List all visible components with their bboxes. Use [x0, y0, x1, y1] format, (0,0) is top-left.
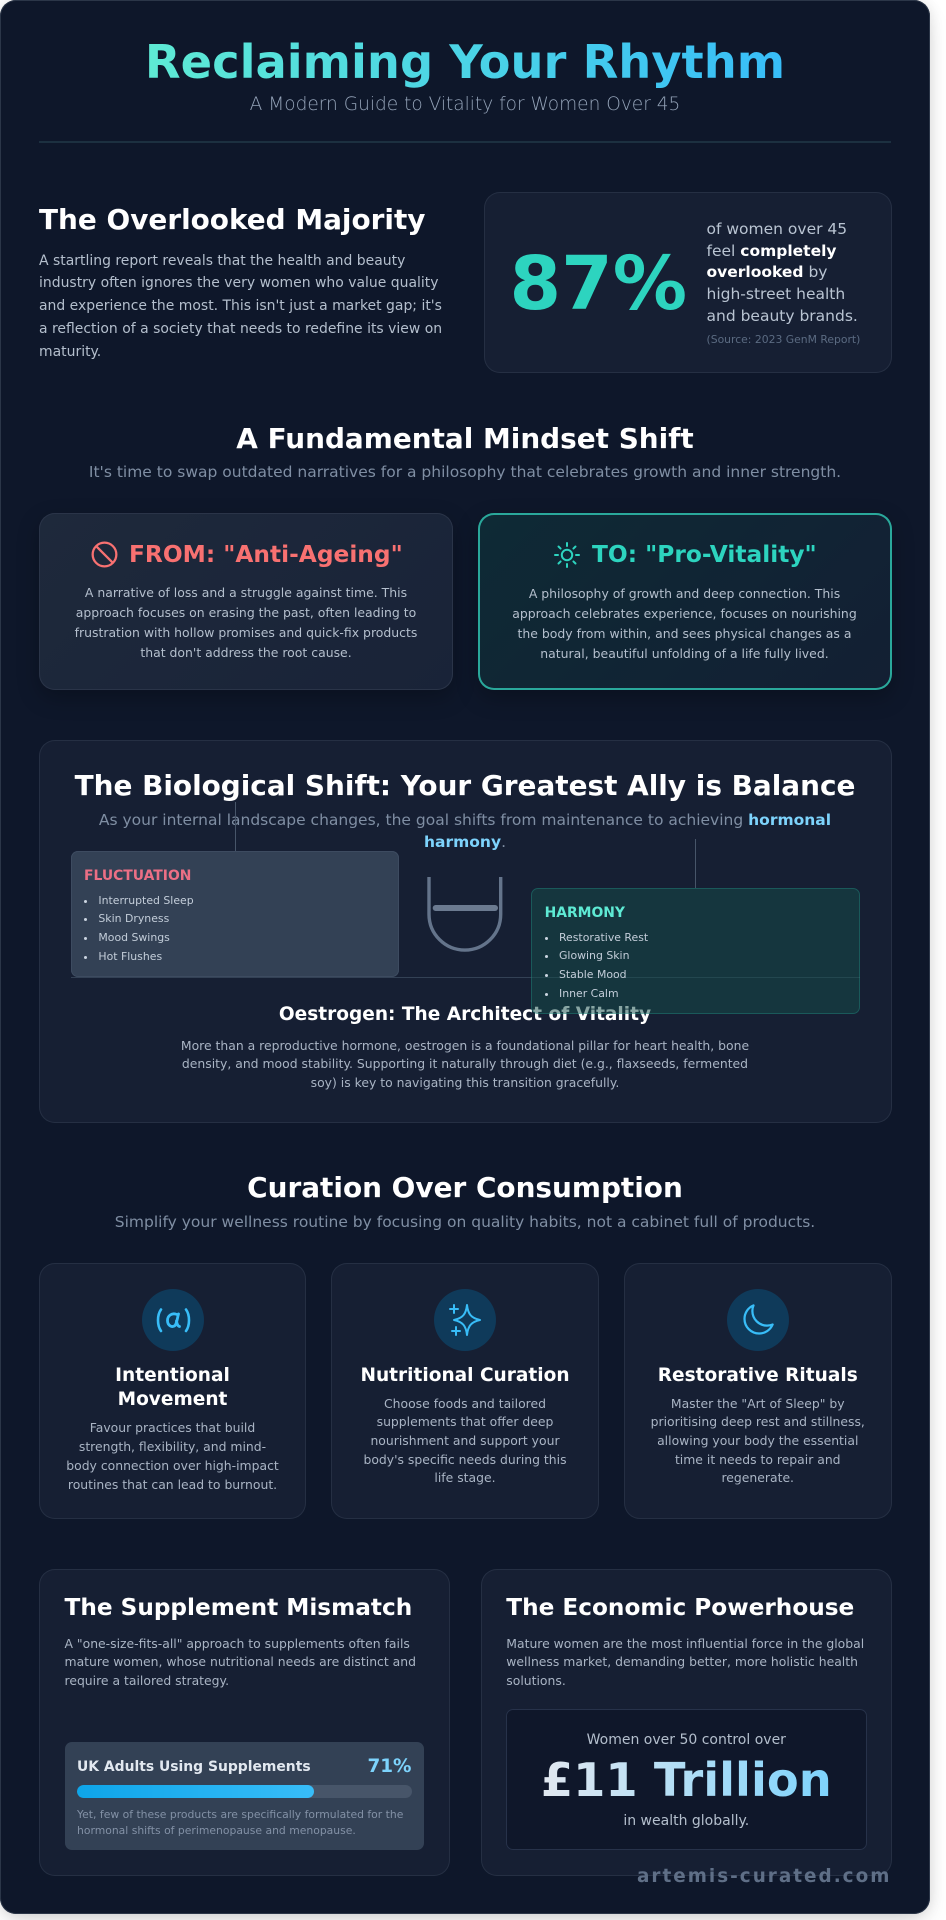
subheading: harmony.	[424, 832, 506, 850]
card heading: Movement	[118, 1389, 227, 1410]
subheading: As your internal landscape changes, the goal shifts from maintenance to achieving hormonal	[99, 810, 831, 828]
heading: The Supplement Mismatch	[64, 1594, 412, 1621]
panel: intentional movement	[39, 1263, 306, 1519]
card text	[363, 1396, 567, 1485]
text block: Mature women are the most influential force in the global	[506, 1636, 864, 1650]
card text: Choose foods and tailored	[384, 1396, 546, 1410]
card heading: TO: "Pro-Vitality"	[592, 541, 817, 568]
card text: nourishment and support your	[370, 1433, 560, 1448]
progress card	[64, 1742, 424, 1850]
panel: to pro-vitality	[478, 513, 892, 690]
oestrogen text: More than a reproductive hormone, oestrogen is a foundational pillar for heart health, bone	[181, 1038, 749, 1052]
list: Restorative Rest	[559, 931, 648, 944]
card text	[66, 1420, 279, 1492]
card text: strength, flexibility, and mind-	[79, 1439, 266, 1454]
text block	[39, 253, 442, 360]
list: Glowing Skin	[559, 949, 629, 962]
panel: supplement mismatch	[39, 1569, 450, 1876]
bar fill	[77, 1785, 314, 1798]
panel: restorative rituals	[624, 1263, 892, 1519]
section heading: curation	[115, 1171, 815, 1230]
oestrogen text: density, and mood stability. Supporting it naturally through diet (e.g., flaxseeds, fermented	[182, 1056, 748, 1071]
watermark: artemis-curated.com	[637, 1866, 891, 1887]
card text: regenerate.	[721, 1470, 794, 1485]
card text: life stage.	[434, 1470, 496, 1485]
stat text: feel completely	[706, 242, 837, 260]
fluctuation box	[71, 851, 399, 977]
card text: supplements that offer deep	[377, 1414, 553, 1429]
card text	[74, 584, 417, 660]
card text: body's specific needs during this	[363, 1452, 567, 1467]
wealth intro: Women over 50 control over	[587, 1732, 786, 1748]
card text: routines that can lead to burnout.	[68, 1476, 277, 1492]
list: Skin Dryness	[98, 912, 169, 925]
section heading: mindset shift	[89, 422, 841, 480]
progress note: hormonal shifts of perimenopause and menopause.	[77, 1824, 356, 1837]
card text: prioritising deep rest and stillness,	[651, 1414, 865, 1429]
stat text: high-street health	[706, 285, 845, 303]
icon: movement signal	[142, 1289, 204, 1351]
card text: A philosophy of growth and deep connection. This	[529, 586, 840, 601]
list: Inner Calm	[559, 987, 619, 1000]
heading: The Biological Shift: Your Greatest Ally is Balance	[75, 769, 855, 802]
icon: sparkles	[434, 1289, 496, 1351]
card text: natural, beautiful unfolding of a life fully lived.	[540, 646, 829, 661]
card heading: FROM: "Anti-Ageing"	[129, 541, 403, 568]
heading: The Overlooked Majority	[39, 202, 425, 236]
card text	[651, 1396, 865, 1485]
stat text: overlooked by	[706, 263, 827, 281]
card text: that don't address the root cause.	[140, 645, 352, 660]
box heading: HARMONY	[545, 905, 625, 921]
box heading: FLUCTUATION	[84, 868, 191, 884]
oestrogen text: soy) is key to navigating this transition gracefully.	[311, 1075, 619, 1090]
heading: The Economic Powerhouse	[506, 1594, 854, 1621]
text block	[506, 1636, 864, 1688]
text block: solutions.	[506, 1673, 566, 1688]
card text: body connection over high-impact	[66, 1458, 279, 1473]
stat text: of women over 45	[706, 220, 847, 238]
text block: A "one-size-fits-all" approach to supplements often fails	[64, 1636, 410, 1650]
progress note: Yet, few of these products are specifically formulated for the	[77, 1808, 403, 1821]
panel: biological shift	[39, 740, 892, 1123]
text block: require a tailored strategy.	[64, 1673, 229, 1688]
big stat: 87%	[510, 241, 687, 327]
card text: allowing your body the essential	[657, 1433, 858, 1448]
card heading	[115, 1364, 230, 1410]
card text: Master the "Art of Sleep" by	[671, 1396, 845, 1410]
progress note	[77, 1808, 403, 1837]
card heading: Restorative Rituals	[658, 1364, 858, 1386]
subheading: Simplify your wellness routine by focusing on quality habits, not a cabinet full of products.	[115, 1212, 815, 1230]
list	[84, 894, 194, 963]
card text: frustration with hollow promises and quick-fix products	[75, 625, 417, 640]
progress value: 71%	[367, 1756, 412, 1776]
card text: the body from within, and sees physical changes as a	[517, 626, 852, 641]
card text	[512, 586, 857, 661]
text block	[64, 1636, 416, 1688]
card text: time it needs to repair and	[675, 1452, 841, 1467]
heading: A Fundamental Mindset Shift	[236, 422, 694, 455]
progress label: UK Adults Using Supplements	[77, 1759, 311, 1775]
progress bar	[77, 1785, 412, 1798]
text block: A startling report reveals that the health and beauty	[39, 253, 405, 269]
wealth card	[506, 1709, 867, 1850]
subtitle: A Modern Guide to Vitality for Women Over 45	[250, 94, 680, 115]
wealth note: in wealth globally.	[623, 1813, 749, 1829]
list: Stable Mood	[559, 968, 627, 981]
stat text	[706, 220, 858, 325]
list: Interrupted Sleep	[98, 894, 194, 907]
list: Hot Flushes	[98, 950, 162, 963]
text block: industry often ignores the very women who value quality	[39, 275, 438, 291]
subheading: It's time to swap outdated narratives for a philosophy that celebrates growth and inner strength.	[89, 462, 841, 480]
card text: Favour practices that build	[90, 1420, 255, 1435]
oestrogen heading: Oestrogen: The Architect of Vitality	[279, 1004, 651, 1025]
icon: prohibited	[92, 542, 118, 568]
list	[545, 931, 648, 1000]
list: Mood Swings	[98, 931, 170, 944]
text block: a reflection of a society that needs to redefine its view on	[39, 321, 442, 337]
panel: economic powerhouse	[481, 1569, 892, 1876]
wealth value: £11 Trillion	[541, 1753, 832, 1807]
card text: approach focuses on erasing the past, often leading to	[76, 605, 416, 620]
card heading: Nutritional Curation	[360, 1364, 570, 1386]
source: (Source: 2023 GenM Report)	[706, 333, 860, 346]
text block: wellness market, demanding better, more holistic health	[506, 1654, 858, 1669]
card text: A narrative of loss and a struggle against time. This	[85, 584, 407, 600]
panel: nutritional curation	[331, 1263, 599, 1519]
icon: moon	[727, 1289, 789, 1351]
heading: Curation Over Consumption	[247, 1171, 683, 1204]
icon: balance bowl	[427, 877, 502, 952]
oestrogen text	[181, 1038, 749, 1090]
section: the overlooked majority	[39, 202, 442, 360]
text block: maturity.	[39, 344, 101, 360]
panel: 87% stat card	[484, 192, 892, 373]
stat text: and beauty brands.	[706, 307, 858, 325]
icon: sun	[554, 542, 580, 568]
panel: from anti-ageing	[39, 513, 453, 690]
card heading: Intentional	[115, 1364, 230, 1386]
subheading	[99, 810, 831, 850]
harmony box	[531, 888, 860, 1014]
title: Reclaiming Your Rhythm	[145, 35, 785, 89]
card text: approach celebrates experience, focuses on nourishing	[512, 606, 857, 621]
text block: and experience the most. This isn't just a market gap; it's	[39, 298, 442, 314]
text block: mature women, whose nutritional needs are distinct and	[64, 1654, 416, 1669]
